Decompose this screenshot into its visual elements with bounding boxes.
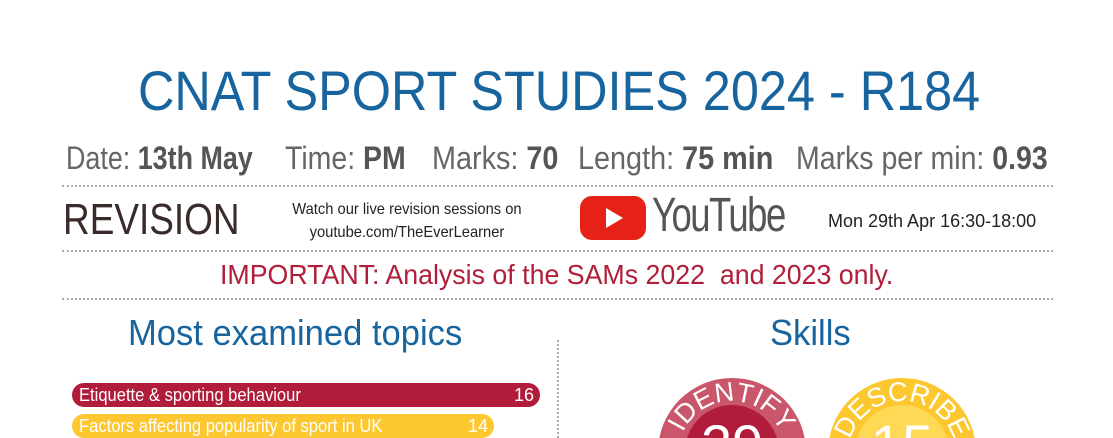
badge: identify: IDENTIFY [668,382,797,430]
bar: factors [72,414,494,438]
icon: youtube logo: YouTube [652,189,785,242]
exam info row: Time: PM [285,140,406,176]
bar: etiquette [72,383,540,407]
session date: Mon 29th Apr 16:30-18:00 [828,211,1036,231]
exam info row: Length: 75 min [578,140,773,176]
exam info row: Marks per min: 0.93 [796,140,1048,176]
important note: IMPORTANT: Analysis of the SAMs 2022 and 2023 only. [220,259,893,290]
title: CNAT SPORT STUDIES 2024 - R184 [138,59,980,122]
heading: skills: Skills [770,312,851,353]
bar: factors: 14 [468,416,488,436]
revision heading: REVISION [63,195,240,244]
exam info row [66,140,1048,176]
bar: factors: Factors affecting popularity of sport in UK [79,416,382,436]
exam info row: Date: 13th May [66,140,253,176]
heading: most examined topics: Most examined topics [128,312,462,353]
bar: etiquette: Etiquette & sporting behaviour [79,385,301,405]
exam info row: Marks: 70 [432,140,558,176]
bar: etiquette: 16 [514,385,534,405]
revision session text [292,201,522,241]
skill badges [659,378,975,438]
icon: youtube logo [580,189,785,242]
revision session text: Watch our live revision sessions on [292,201,522,218]
revision session text: youtube.com/TheEverLearner [310,224,504,241]
